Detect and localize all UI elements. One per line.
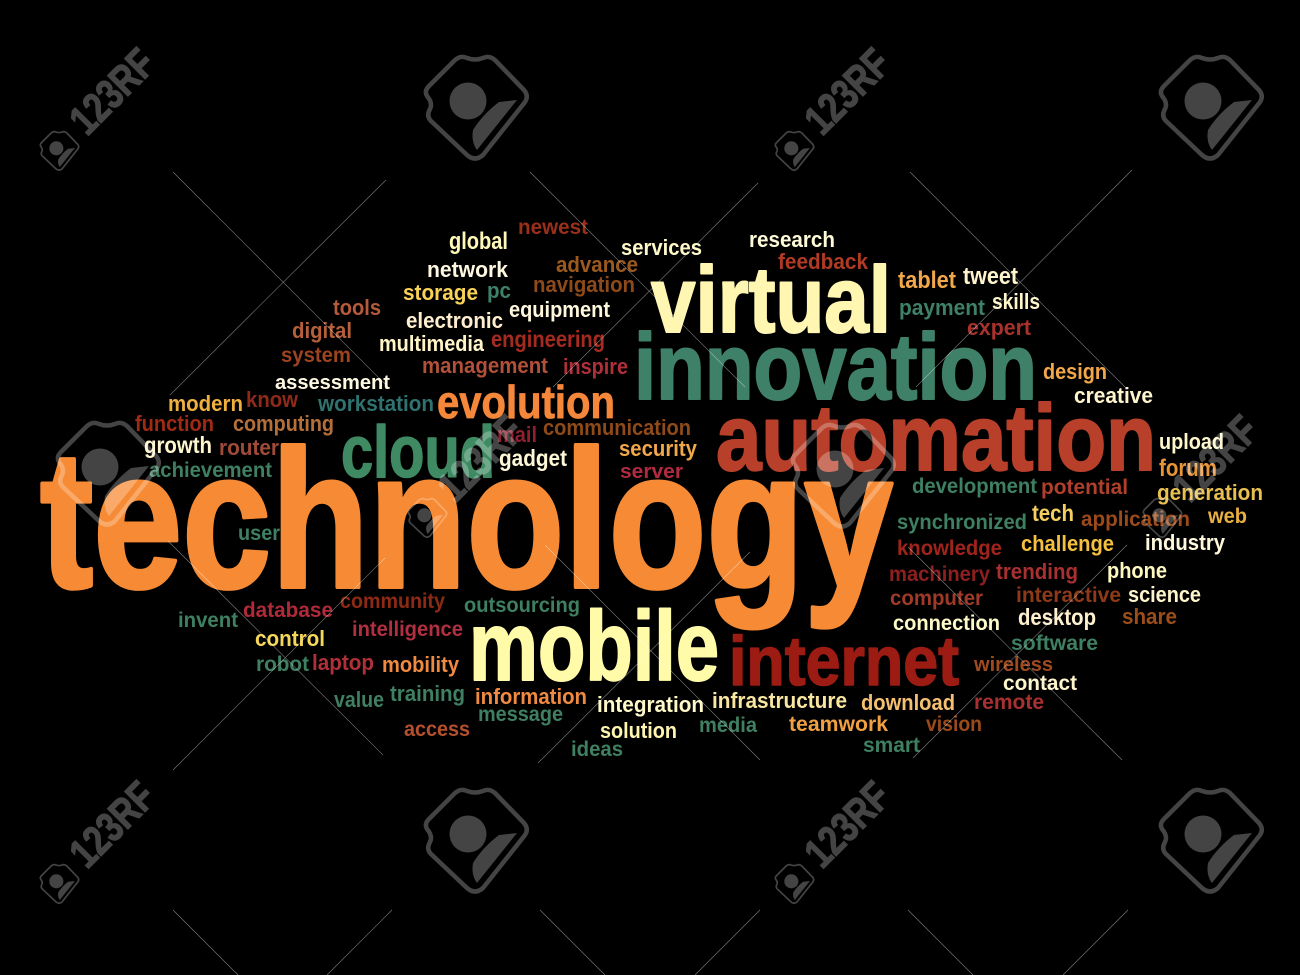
word: innovation: innovation bbox=[634, 314, 1037, 419]
watermark logo row 2 left bbox=[408, 406, 532, 537]
word: communication: communication bbox=[543, 415, 691, 440]
word: server: server bbox=[620, 461, 683, 483]
word: tablet: tablet bbox=[898, 267, 956, 294]
word: computing: computing bbox=[233, 411, 334, 436]
word: electronic: electronic bbox=[406, 308, 503, 333]
word: advance: advance bbox=[556, 252, 638, 277]
word: technology: technology bbox=[40, 410, 893, 629]
word: mobile: mobile bbox=[469, 591, 719, 701]
word: download: download bbox=[861, 690, 955, 715]
icon: watermark egg row 2 right bbox=[793, 425, 894, 526]
word: training: training bbox=[390, 681, 465, 706]
word: tech: tech bbox=[1032, 500, 1074, 526]
icon: watermark egg row 1 left bbox=[426, 57, 527, 158]
word: security: security bbox=[619, 436, 698, 461]
word: vision: vision bbox=[926, 713, 982, 736]
word: share: share bbox=[1122, 604, 1177, 629]
word: smart: smart bbox=[863, 734, 920, 757]
word: multimedia: multimedia bbox=[379, 331, 485, 356]
word: global: global bbox=[449, 228, 508, 255]
word: infrastructure: infrastructure bbox=[712, 688, 847, 713]
word: information: information bbox=[475, 684, 587, 709]
word: mobility: mobility bbox=[382, 652, 460, 677]
word: user: user bbox=[238, 522, 280, 545]
word: database: database bbox=[243, 599, 333, 622]
word: assessment: assessment bbox=[275, 372, 390, 394]
word: control: control bbox=[255, 626, 325, 651]
word: internet: internet bbox=[729, 622, 959, 700]
word: value: value bbox=[334, 687, 384, 712]
word: intelligence: intelligence bbox=[352, 618, 463, 641]
word: knowledge: knowledge bbox=[897, 537, 1002, 560]
watermark logo row 2 right bbox=[1143, 406, 1267, 537]
word: equipment: equipment bbox=[509, 297, 611, 322]
word: storage: storage bbox=[403, 280, 478, 305]
watermark logo row 2 left: 123RF bbox=[428, 406, 532, 510]
word: tools: tools bbox=[333, 295, 381, 320]
word: teamwork: teamwork bbox=[789, 713, 888, 736]
word: payment: payment bbox=[899, 295, 986, 320]
word: ideas: ideas bbox=[571, 738, 623, 761]
word: solution: solution bbox=[600, 718, 677, 743]
word: know: know bbox=[246, 387, 299, 412]
word: outsourcing: outsourcing bbox=[464, 594, 580, 617]
word: wireless: wireless bbox=[973, 654, 1053, 676]
icon: watermark egg row 3 right bbox=[1161, 790, 1262, 892]
word: connection: connection bbox=[893, 612, 1000, 635]
word: workstation: workstation bbox=[317, 391, 434, 416]
watermark logo row 3 left bbox=[40, 772, 164, 903]
watermark logo row 1 right bbox=[775, 39, 899, 170]
word: creative: creative bbox=[1074, 383, 1153, 408]
word: industry: industry bbox=[1145, 530, 1226, 555]
watermark logo row 3 right: 123RF bbox=[795, 772, 899, 876]
word: skills: skills bbox=[992, 289, 1040, 314]
word: phone: phone bbox=[1107, 558, 1167, 583]
word: router: router bbox=[219, 435, 279, 460]
word: desktop: desktop bbox=[1018, 604, 1096, 630]
word cloud bbox=[40, 216, 1263, 761]
word: achievement: achievement bbox=[149, 459, 272, 482]
word: feedback: feedback bbox=[778, 249, 869, 274]
word: forum: forum bbox=[1159, 455, 1217, 482]
word: virtual: virtual bbox=[651, 247, 891, 352]
word: modern: modern bbox=[168, 391, 243, 416]
word: computer: computer bbox=[890, 587, 983, 610]
watermark logo row 1 left bbox=[40, 39, 164, 170]
word: invent: invent bbox=[178, 609, 238, 632]
word: access: access bbox=[404, 718, 470, 741]
word: integration: integration bbox=[597, 692, 704, 717]
word: development: development bbox=[912, 475, 1037, 498]
word: tweet: tweet bbox=[963, 263, 1018, 290]
word: newest: newest bbox=[518, 216, 588, 239]
word: synchronized: synchronized bbox=[897, 511, 1027, 534]
icon: watermark egg row 3 left bbox=[426, 790, 527, 892]
word: gadget: gadget bbox=[499, 445, 567, 471]
icon: watermark egg row 2 left bbox=[58, 423, 159, 524]
word: automation: automation bbox=[716, 385, 1156, 490]
word: engineering: engineering bbox=[491, 326, 605, 352]
word: management: management bbox=[422, 353, 549, 378]
word: digital: digital bbox=[292, 318, 352, 343]
word: community: community bbox=[340, 590, 445, 613]
word: laptop: laptop bbox=[312, 650, 374, 675]
word: interactive: interactive bbox=[1016, 584, 1121, 607]
word: remote: remote bbox=[974, 691, 1044, 714]
word: challenge: challenge bbox=[1021, 531, 1114, 556]
watermark logo row 3 left: 123RF bbox=[60, 772, 164, 876]
word: growth: growth bbox=[144, 432, 212, 458]
word: mail: mail bbox=[497, 422, 537, 447]
word: application: application bbox=[1081, 508, 1190, 531]
word: cloud: cloud bbox=[341, 412, 495, 493]
word: upload: upload bbox=[1159, 429, 1224, 454]
word: machinery: machinery bbox=[889, 563, 990, 586]
watermark logo row 3 right bbox=[775, 772, 899, 903]
word: services: services bbox=[621, 235, 702, 260]
word: pc: pc bbox=[487, 278, 511, 303]
word: generation: generation bbox=[1157, 480, 1263, 505]
word: message: message bbox=[478, 703, 563, 726]
word: robot: robot bbox=[256, 653, 309, 676]
word: expert: expert bbox=[967, 315, 1032, 340]
icon: watermark egg row 1 right bbox=[1161, 57, 1262, 158]
word: evolution: evolution bbox=[437, 376, 615, 428]
watermark logo row 1 right: 123RF bbox=[795, 39, 899, 143]
watermark logo row 2 right: 123RF bbox=[1163, 406, 1267, 510]
word: contact: contact bbox=[1003, 672, 1077, 695]
word: function: function bbox=[135, 411, 214, 436]
word: media: media bbox=[699, 714, 757, 737]
word: system: system bbox=[281, 344, 351, 367]
word: web: web bbox=[1207, 505, 1247, 528]
word: design: design bbox=[1043, 359, 1107, 384]
word: software: software bbox=[1011, 632, 1098, 655]
watermark logo row 1 left: 123RF bbox=[60, 39, 164, 143]
word: trending: trending bbox=[996, 559, 1078, 584]
word: navigation: navigation bbox=[533, 272, 635, 297]
word: inspire: inspire bbox=[563, 354, 628, 379]
word: potential: potential bbox=[1041, 476, 1128, 499]
word: science: science bbox=[1128, 582, 1201, 607]
word: research: research bbox=[749, 227, 835, 252]
word: network: network bbox=[427, 257, 509, 282]
